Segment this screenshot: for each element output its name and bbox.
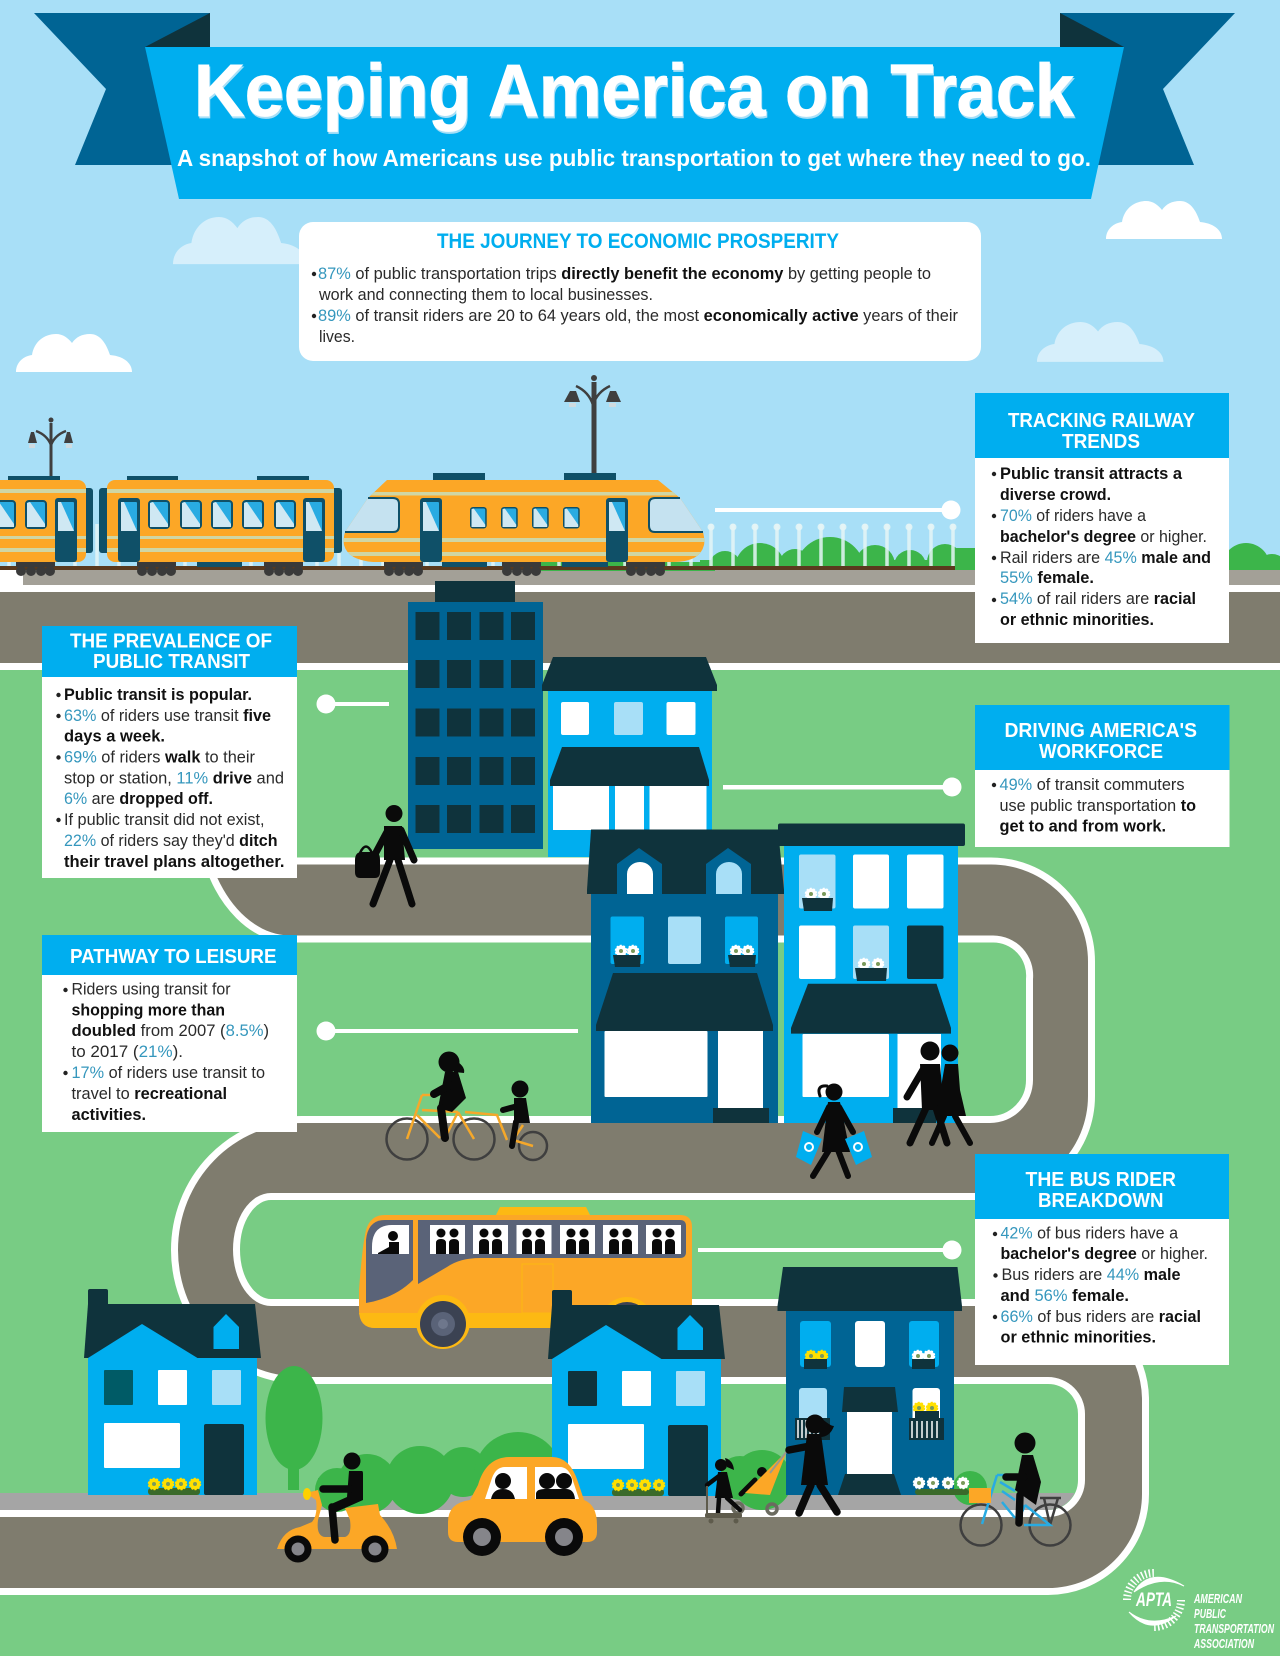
heading: THE PREVALENCE OF <box>70 630 272 652</box>
house middle <box>548 1290 725 1496</box>
train car middle <box>99 476 342 576</box>
body text: 63% of riders use transit five <box>64 707 271 725</box>
banner left tail <box>34 13 210 165</box>
heading: PUBLIC TRANSIT <box>93 650 250 673</box>
car <box>448 1457 597 1556</box>
clouds <box>16 201 1222 372</box>
street lamp tall <box>564 375 621 474</box>
body text: use public transportation to <box>1000 797 1196 815</box>
panel: journey to economic prosperity <box>299 222 981 361</box>
connector: bus <box>698 1240 962 1260</box>
figure: couple walking <box>907 1042 970 1143</box>
body text: Riders using transit for <box>72 980 231 998</box>
tree <box>266 1366 322 1490</box>
sidewalk strip and platform <box>0 570 1280 592</box>
logo wordmark: PUBLIC <box>1194 1607 1227 1621</box>
road: top straight <box>0 585 1280 670</box>
hedges and fence behind train <box>9 524 1280 607</box>
body text: work and connecting them to local businesses. <box>318 286 653 304</box>
body text: 87% of public transportation trips directly benefit the economy by getting people to <box>318 265 931 283</box>
body text: 17% of riders use transit to <box>72 1064 265 1082</box>
body text: 42% of bus riders have a <box>1000 1224 1179 1242</box>
heading: TRACKING RAILWAY <box>1008 409 1195 432</box>
body text: 49% of transit commuters <box>1000 776 1184 794</box>
heading <box>1008 409 1195 453</box>
body text: bachelor's degree or higher. <box>1000 528 1207 546</box>
street lamp small <box>28 418 73 480</box>
connector: leisure <box>316 1022 578 1040</box>
building: bright blue shop <box>778 824 965 1123</box>
logo wordmark: ASSOCIATION <box>1193 1637 1255 1651</box>
panel: driving america's workforce <box>975 705 1230 847</box>
hedge by houses <box>315 1432 987 1520</box>
logo wordmark: AMERICAN <box>1193 1592 1243 1606</box>
body text: get to and from work. <box>1000 818 1166 836</box>
figure: scooter rider <box>277 1452 397 1562</box>
body text: their travel plans altogether. <box>64 853 284 871</box>
heading: TRENDS <box>1062 430 1140 453</box>
heading <box>1026 1168 1176 1212</box>
heading: WORKFORCE <box>1039 740 1163 763</box>
body text: 66% of bus riders are racial <box>1000 1308 1201 1326</box>
logo mark <box>1127 1573 1184 1627</box>
body text <box>1000 465 1211 629</box>
panel: tracking railway trends <box>975 393 1229 643</box>
figure: parent with stroller <box>733 1414 837 1514</box>
APTA logo: APTA <box>1135 1590 1172 1611</box>
body text: 89% of transit riders are 20 to 64 years old, the most economically active years of their <box>318 307 958 325</box>
panel: prevalence of public transit <box>42 626 297 878</box>
heading <box>70 630 272 673</box>
body text: 22% of riders say they'd ditch <box>64 832 278 850</box>
body text: or ethnic minorities. <box>1000 1328 1156 1346</box>
connector: railway <box>715 500 960 520</box>
body text: shopping more than <box>72 1002 225 1020</box>
body text: lives. <box>319 328 355 346</box>
title banner <box>34 13 1235 199</box>
body text: doubled from 2007 (8.5%) <box>72 1022 269 1040</box>
body text: diverse crowd. <box>1000 486 1111 504</box>
building: mansard shop <box>587 830 784 1123</box>
figure: shopper with bags <box>796 1084 872 1176</box>
connector: prevalence <box>316 694 389 714</box>
banner main ribbon <box>145 47 1124 199</box>
bus wheels <box>600 1297 654 1351</box>
body text: activities. <box>72 1106 146 1124</box>
heading <box>1004 719 1197 763</box>
train <box>0 473 710 576</box>
body text: Public transit is popular. <box>64 686 252 704</box>
body text: If public transit did not exist, <box>64 811 264 829</box>
panel: bus rider breakdown <box>975 1154 1229 1365</box>
heading: PATHWAY TO LEISURE <box>70 945 276 968</box>
subtitle: A snapshot of how Americans use public transportation to get where they need to go. <box>177 145 1091 171</box>
train front car <box>340 473 710 576</box>
body text: bachelor's degree or higher. <box>1000 1245 1208 1263</box>
building: blue shop <box>542 657 717 857</box>
body text: 6% are dropped off. <box>64 790 213 808</box>
body text: or ethnic minorities. <box>1000 611 1154 629</box>
figure: cyclist with basket <box>960 1432 1070 1546</box>
bus passengers <box>378 1228 675 1254</box>
rail track <box>0 566 955 571</box>
main title: Keeping America on Track <box>194 49 1075 132</box>
body text: 69% of riders walk to their <box>64 748 255 766</box>
heading: DRIVING AMERICA'S <box>1004 719 1197 742</box>
body text: Public transit attracts a <box>1000 465 1183 483</box>
body text: travel to recreational <box>72 1085 227 1103</box>
road: serpentine <box>0 864 1142 1588</box>
panel: pathway to leisure <box>42 935 297 1132</box>
APTA logo <box>1127 1573 1275 1651</box>
bus windshield <box>366 1220 413 1303</box>
body text: to 2017 (21%). <box>72 1043 183 1061</box>
train car left <box>0 476 93 576</box>
banner right tail <box>1060 13 1235 165</box>
connector: workforce <box>723 778 962 796</box>
grass background <box>0 572 1280 1656</box>
bus <box>359 1207 692 1351</box>
logo wordmark <box>1193 1592 1275 1651</box>
heading: THE JOURNEY TO ECONOMIC PROSPERITY <box>437 230 839 253</box>
body text: 54% of rail riders are racial <box>1000 590 1196 608</box>
body text <box>72 980 269 1124</box>
building: townhouse <box>778 1267 969 1495</box>
heading: THE BUS RIDER <box>1026 1168 1176 1191</box>
body text: Rail riders are 45% male and <box>1000 549 1211 567</box>
lower sidewalk <box>0 1493 1074 1510</box>
body text: 70% of riders have a <box>1000 507 1147 525</box>
body text: Bus riders are 44% male <box>1002 1266 1180 1284</box>
bus window band <box>418 1220 686 1284</box>
figure: parent and child on tandem bike <box>386 1052 547 1160</box>
body text <box>1000 776 1196 836</box>
figure: pedestrian with bag <box>355 805 414 904</box>
house left <box>84 1289 261 1495</box>
heading: BREAKDOWN <box>1038 1189 1164 1212</box>
figure: child on scooter <box>705 1458 742 1524</box>
body text <box>1000 1224 1208 1346</box>
body text: 55% female. <box>1000 569 1094 587</box>
body text: days a week. <box>64 728 165 746</box>
body text <box>318 265 958 346</box>
body text: stop or station, 11% drive and <box>64 770 284 788</box>
body text <box>64 686 284 871</box>
body text: and 56% female. <box>1000 1287 1129 1305</box>
building: tall office <box>408 581 543 849</box>
sky background <box>0 0 1280 572</box>
